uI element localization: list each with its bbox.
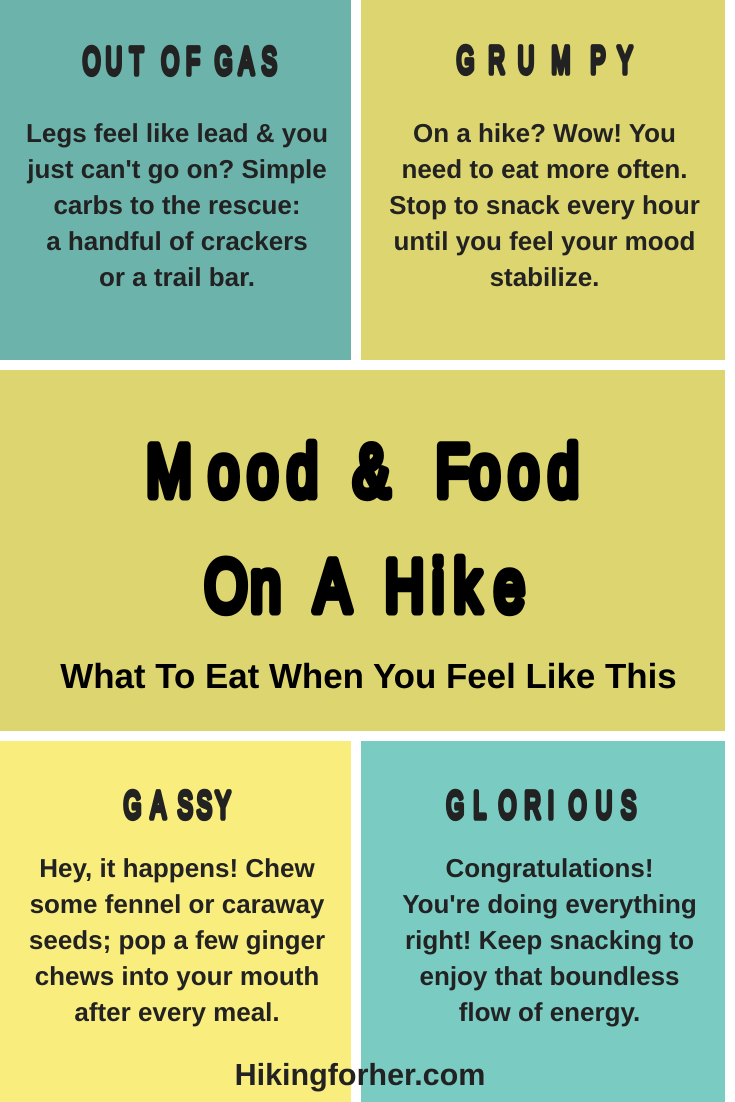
text: grumpy advice: until you feel your mood — [394, 226, 695, 256]
title: mood and food on a hike — [146, 431, 735, 627]
text: grumpy advice: On a hike? Wow! You — [413, 118, 676, 148]
text: out of gas advice: or a trail bar. — [99, 262, 255, 292]
heading: out of gas: OUT OF GAS — [83, 41, 606, 83]
text: glorious advice: flow of energy. — [459, 997, 640, 1027]
text: gassy advice: chews into your mouth — [35, 961, 319, 991]
text: glorious advice — [402, 853, 697, 1027]
text: grumpy advice: Stop to snack every hour — [389, 190, 700, 220]
text: grumpy advice: need to eat more often. — [401, 154, 688, 184]
text: glorious advice: You're doing everything — [402, 889, 697, 919]
text: grumpy advice: stabilize. — [490, 262, 599, 292]
text: glorious advice: enjoy that boundless — [419, 961, 680, 991]
panel: gassy — [0, 741, 351, 1102]
text: out of gas advice: carbs to the rescue: — [53, 190, 301, 220]
text: out of gas advice: just can't go on? Simple — [27, 154, 327, 184]
text: glorious advice: right! Keep snacking to — [405, 925, 694, 955]
website footer: Hikingforher.com — [235, 1058, 485, 1092]
heading: gassy: GASSY — [124, 785, 231, 827]
heading: grumpy: GRUMPY — [457, 40, 633, 82]
heading: glorious: GLORIOUS — [446, 785, 636, 827]
text: out of gas advice — [26, 118, 328, 292]
text: gassy advice: some fennel or caraway — [30, 889, 324, 919]
panel: glorious — [361, 741, 725, 1102]
text: gassy advice: seeds; pop a few ginger — [29, 925, 325, 955]
text: grumpy advice — [389, 118, 700, 292]
text: glorious advice: Congratulations! — [446, 853, 654, 883]
text: out of gas advice: a handful of crackers — [46, 226, 308, 256]
panel: grumpy — [361, 0, 725, 360]
text: gassy advice — [29, 853, 325, 1027]
text: gassy advice: after every meal. — [74, 997, 280, 1027]
text: gassy advice: Hey, it happens! Chew — [39, 853, 315, 883]
text: out of gas advice: Legs feel like lead & you — [26, 118, 328, 148]
panel: out of gas — [0, 0, 351, 360]
subtitle: What To Eat When You Feel Like This — [60, 657, 677, 696]
panel: main title — [0, 370, 725, 731]
